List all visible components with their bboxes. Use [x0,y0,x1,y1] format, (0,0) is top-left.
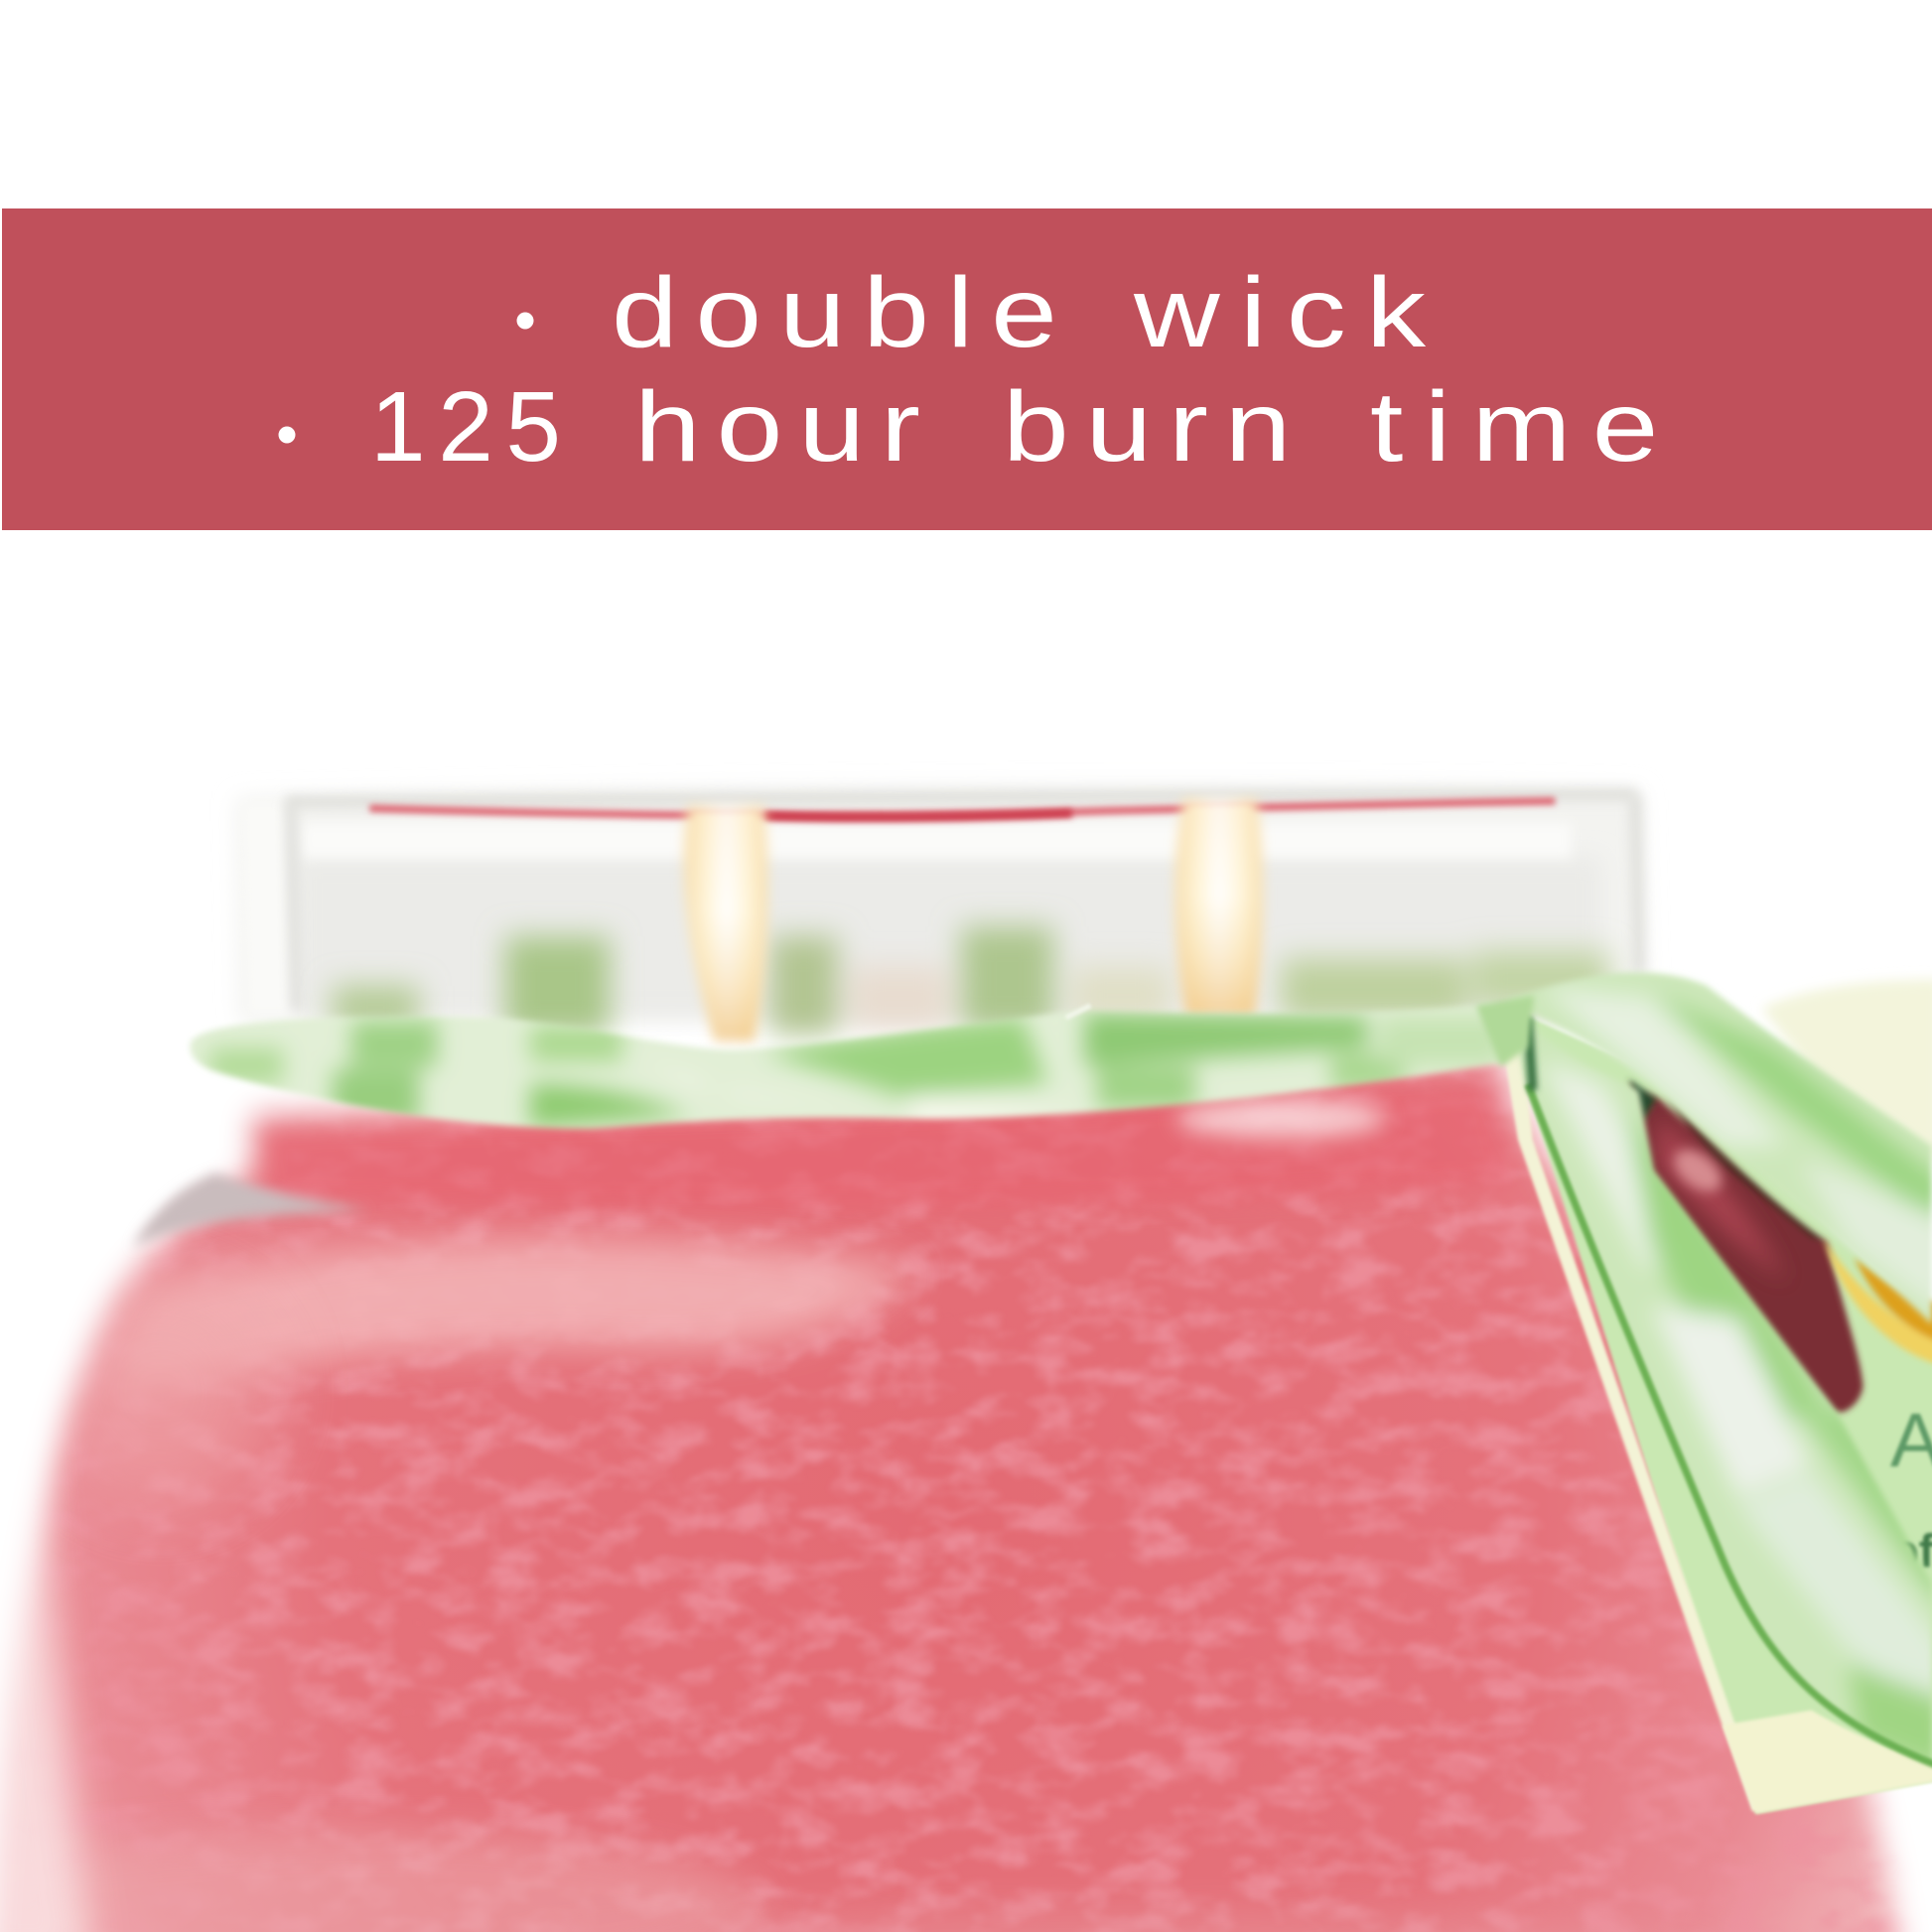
banner text: 125 hour burn time [278,371,1658,483]
glass rim [236,787,1645,1035]
banner text: 125 hour burn time: time [1370,371,1658,483]
left flame [684,806,768,1041]
red wax line [369,801,1555,816]
green reflections [333,926,1608,1035]
banner text: 125 hour burn time: burn [1003,371,1291,483]
photo: candle jar [0,787,1932,1932]
yellow bowl [1824,1238,1932,1365]
wax body [0,1035,1932,1932]
banner text: double wick [516,257,1427,368]
flames [684,798,1263,1041]
banner text: double wick: double [612,257,1057,368]
ribbon tail long [1517,1015,1932,1769]
saturated collar under ribbon [252,1084,1516,1209]
ribbon band [185,998,1516,1134]
banner [2,208,1932,530]
banner text: double wick: wick [1133,257,1427,368]
right flame [1174,798,1263,1017]
green tag [1498,1004,1932,1814]
pale left edge [0,1355,92,1932]
cream tag behind ribbon [1762,980,1932,1165]
banner text: 125 hour burn time: 125 [370,371,561,483]
knot [1476,996,1534,1067]
grey shoulder reflection [133,1173,369,1247]
tag lettering [1890,1398,1932,1578]
banner text: 125 hour burn time: hour [634,371,920,483]
ribbon tail upper [1527,969,1932,1326]
apple picture [1629,1079,1863,1413]
pale streak [111,1237,918,1392]
